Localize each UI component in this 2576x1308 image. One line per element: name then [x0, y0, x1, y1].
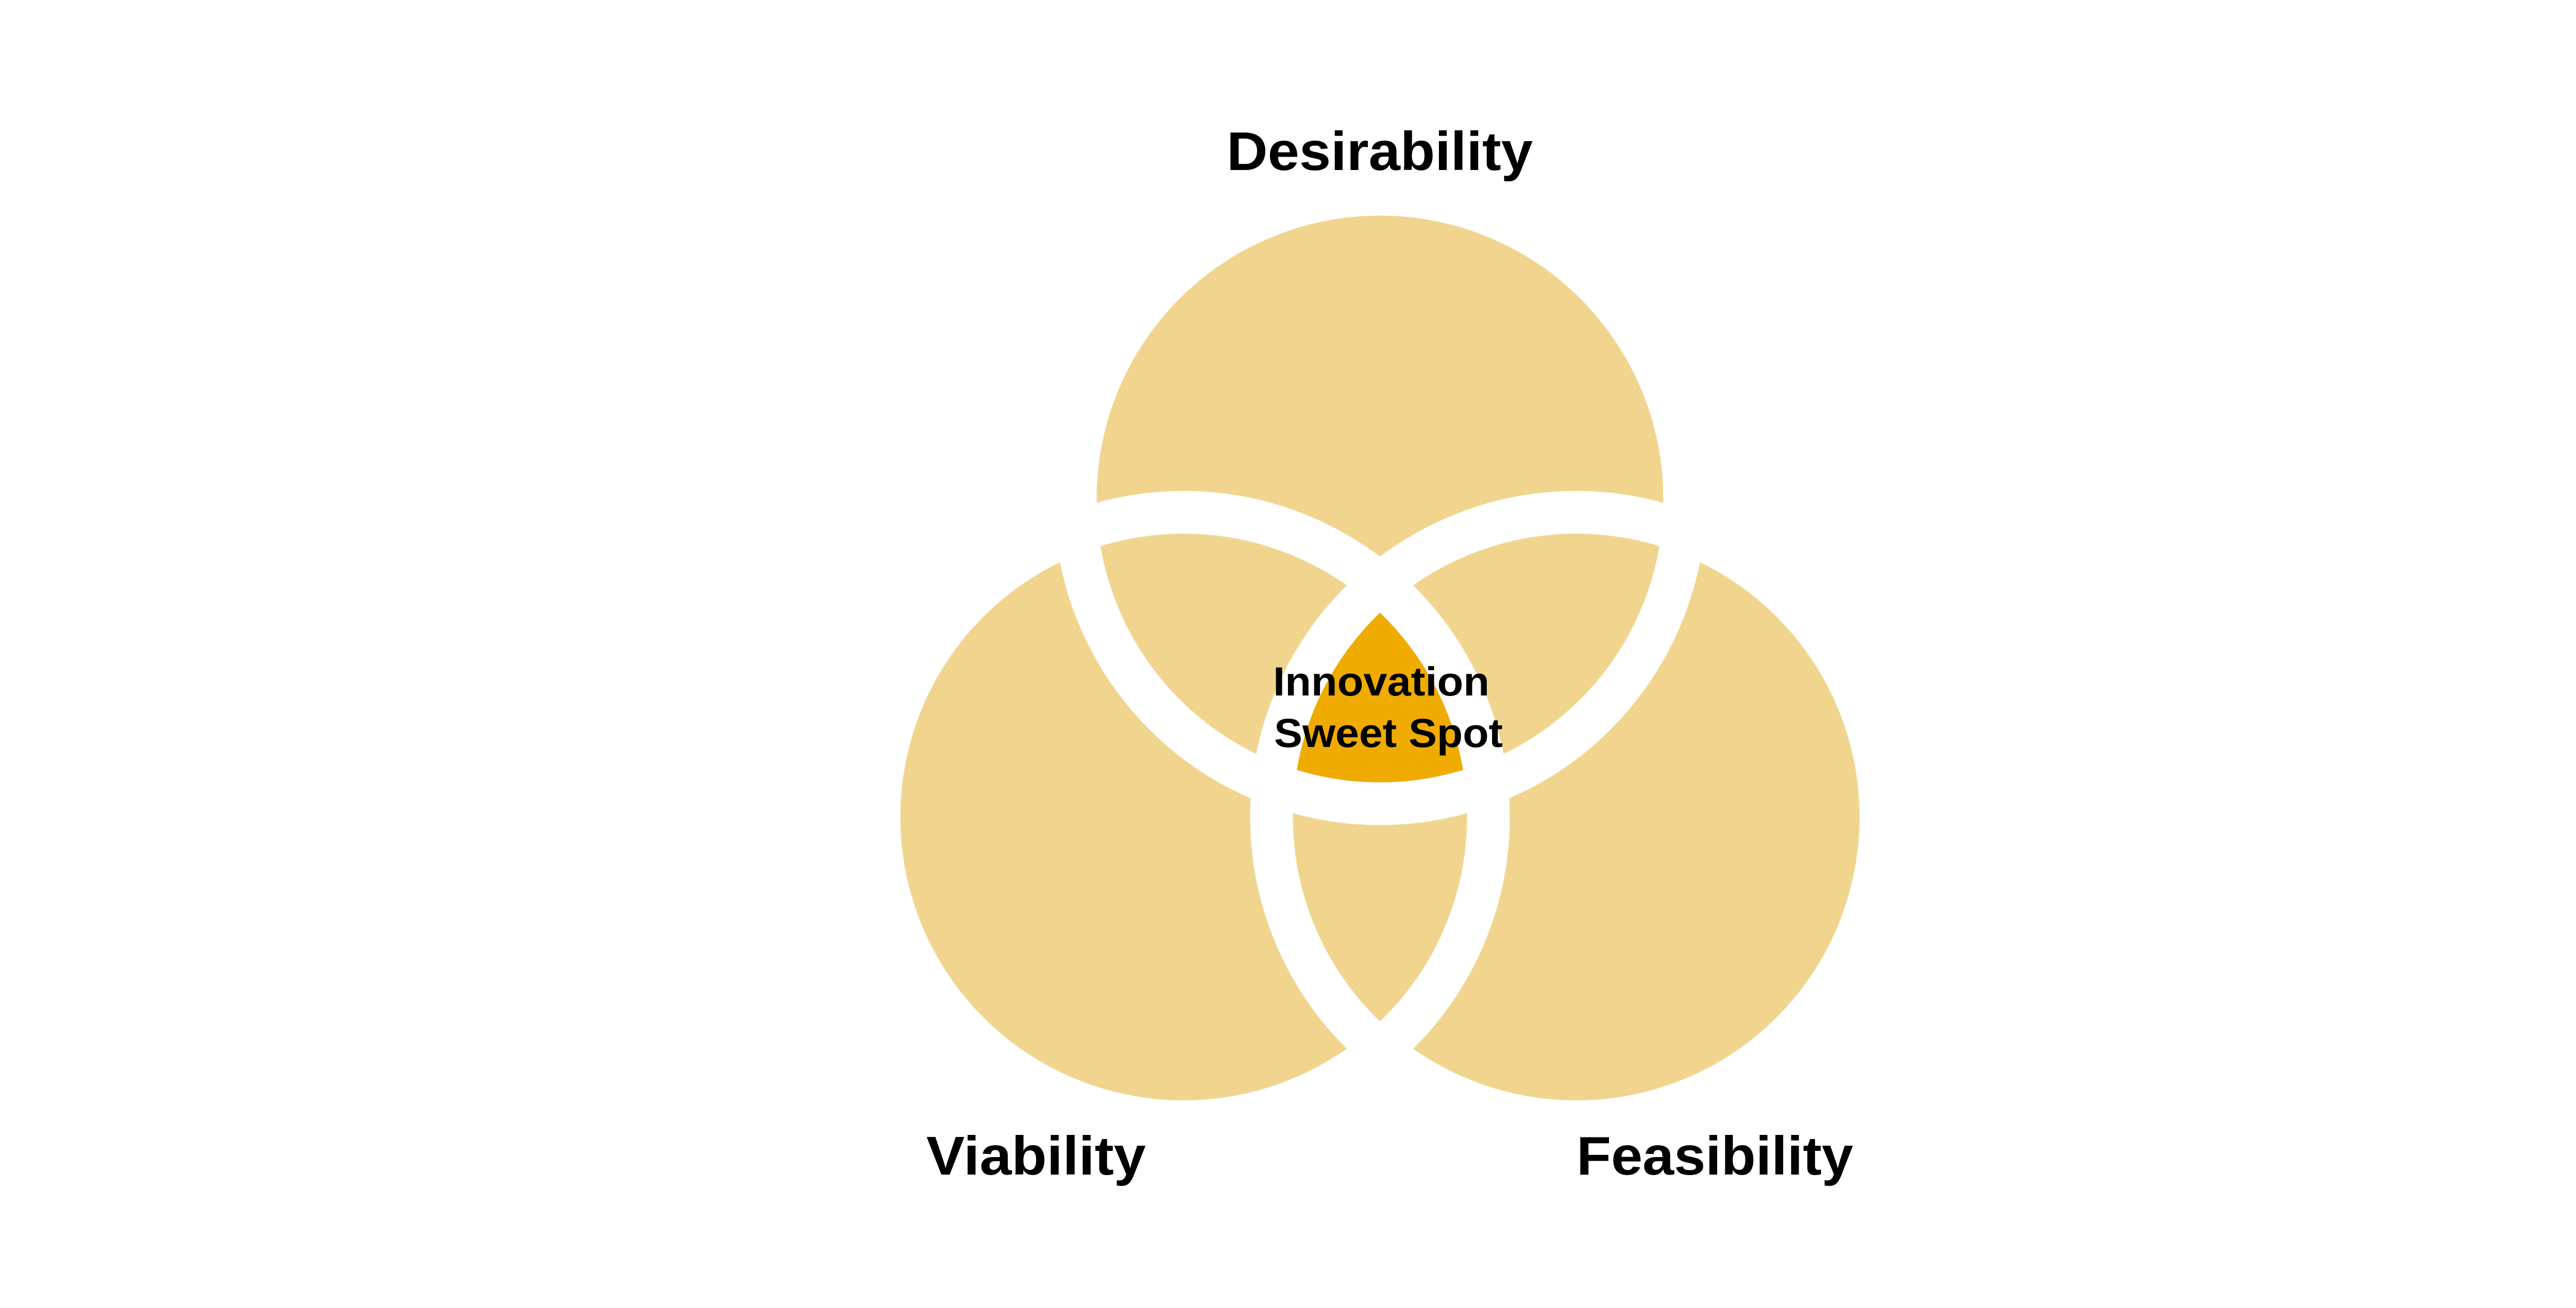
circle: desirability	[1096, 215, 1663, 782]
label: innovation sweet spot: Innovation	[1273, 658, 1489, 704]
label: innovation sweet spot	[1273, 658, 1503, 756]
circle: viability	[901, 534, 1467, 1100]
label: innovation sweet spot: Sweet Spot	[1274, 710, 1503, 756]
label: viability: Viability	[926, 1126, 1146, 1186]
label: desirability: Desirability	[1227, 121, 1533, 182]
label: feasibility: Feasibility	[1577, 1126, 1853, 1186]
central intersection: sweet spot	[1297, 613, 1463, 783]
circle: feasibility	[1293, 534, 1860, 1100]
